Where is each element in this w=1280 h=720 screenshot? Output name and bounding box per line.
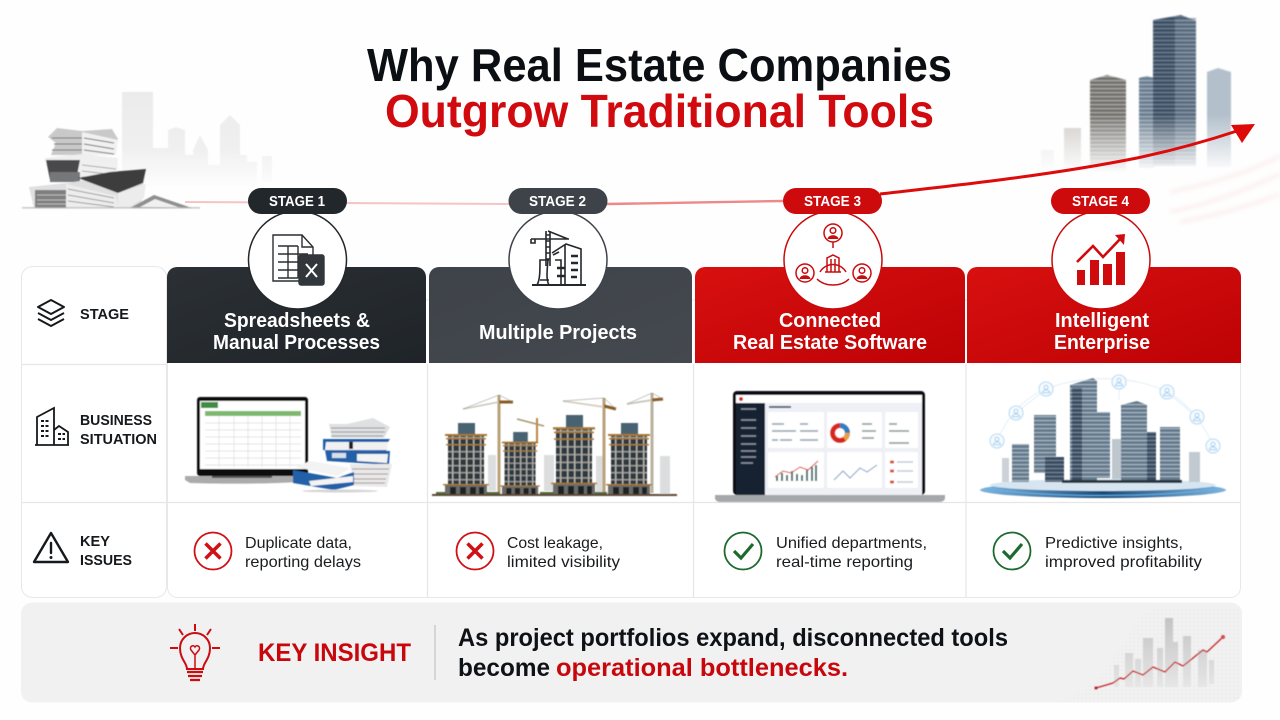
stage 3 header panel: Real Estate Software (733, 332, 927, 354)
stage 4 badge and icon: STAGE 4 (1072, 194, 1129, 210)
stage 4 header panel (967, 267, 1241, 363)
issue 2: Cost leakage, (507, 535, 603, 552)
issue 1: reporting delays (245, 554, 361, 571)
row label: key issues: KEY (80, 533, 110, 550)
faint motion streaks (1170, 156, 1280, 222)
stage 3 header panel (695, 267, 965, 363)
stage 2 badge and icon (508, 188, 608, 309)
icon: light bulb (170, 624, 220, 680)
title: Why Real Estate Companies (367, 39, 952, 91)
dashboard cards (768, 412, 918, 488)
stage 1 header panel: Manual Processes (213, 332, 380, 354)
people nodes (990, 375, 1220, 453)
smart city disc (980, 479, 1226, 498)
stage 4 badge and icon (1051, 188, 1150, 309)
crane 2 (517, 418, 544, 442)
issue 1 (194, 532, 361, 571)
stage 1 badge and icon: STAGE 1 (269, 194, 325, 210)
city towers (1002, 378, 1200, 483)
issue 4 (994, 532, 1202, 571)
row label column (22, 266, 166, 598)
insight text: As project portfolios expand, disconnected tools (458, 624, 1008, 652)
stage 1 badge and icon (248, 188, 347, 309)
row label: stage (38, 300, 129, 326)
issue 2 (456, 532, 620, 571)
title (367, 39, 952, 137)
illustration: laptop with dashboard (715, 391, 945, 502)
stage 3 header panel: Connected (779, 310, 881, 332)
illustration: connected smart city (980, 375, 1226, 498)
mini skyline with trend line (1094, 618, 1225, 690)
title: Outgrow Traditional Tools (385, 85, 934, 137)
insight text: become (458, 654, 550, 682)
binder stack (293, 418, 392, 492)
stage 4 header panel: Intelligent (1055, 310, 1149, 332)
stage 1 header panel: Spreadsheets & (224, 310, 370, 332)
crane 1 (463, 395, 513, 493)
crane 3 (563, 398, 616, 493)
illustration: laptop with spreadsheet and binders (185, 397, 392, 492)
concrete towers (443, 415, 652, 495)
dashboard bar and line charts (775, 461, 913, 482)
body grid (167, 300, 1241, 598)
network arcs (997, 379, 1213, 446)
towers, top right (1035, 15, 1240, 180)
insight text: operational bottlenecks. (556, 654, 848, 682)
issue 4: improved profitability (1045, 554, 1202, 571)
laptop (185, 397, 308, 484)
row label: key issues: ISSUES (80, 552, 132, 569)
donut chart (832, 426, 848, 440)
stage 2 header panel (429, 267, 692, 363)
stage 2 badge and icon: STAGE 2 (529, 194, 586, 210)
stage 1 header panel (167, 267, 426, 363)
insight text (458, 624, 1008, 682)
icon: connected people (796, 224, 871, 285)
laptop frame (715, 495, 945, 502)
row label: business situation: SITUATION (80, 431, 157, 448)
stage 4 header panel: Enterprise (1054, 332, 1150, 354)
issue 1: Duplicate data, (245, 535, 352, 552)
issue 3: real-time reporting (776, 554, 913, 571)
stage 3 badge and icon (783, 188, 882, 309)
row label: stage: STAGE (80, 306, 129, 323)
panel: key insight (21, 602, 1242, 702)
row label: key issues (34, 533, 132, 569)
illustration: buildings under construction (432, 393, 677, 496)
issue 4: Predictive insights, (1045, 535, 1183, 552)
icon: spreadsheet (273, 235, 324, 285)
stage 2 header panel: Multiple Projects (479, 322, 637, 344)
crane 4 (627, 393, 663, 493)
growth arrow (185, 124, 1255, 204)
icon: growth chart (1077, 234, 1125, 285)
icon: crane and building (531, 231, 586, 285)
paper stack, left (22, 128, 200, 209)
row label: business situation (35, 408, 157, 448)
background towers (488, 455, 670, 494)
row label: business situation: BUSINESS (80, 412, 152, 429)
issue 3: Unified departments, (776, 535, 927, 552)
wave mesh decoration (1060, 606, 1241, 702)
issue 2: limited visibility (507, 554, 620, 571)
faint skyline, left (122, 92, 272, 188)
issue 3 (724, 532, 927, 571)
stage 3 badge and icon: STAGE 3 (804, 194, 861, 210)
key insight label: KEY INSIGHT (258, 639, 411, 667)
divider (434, 625, 436, 680)
